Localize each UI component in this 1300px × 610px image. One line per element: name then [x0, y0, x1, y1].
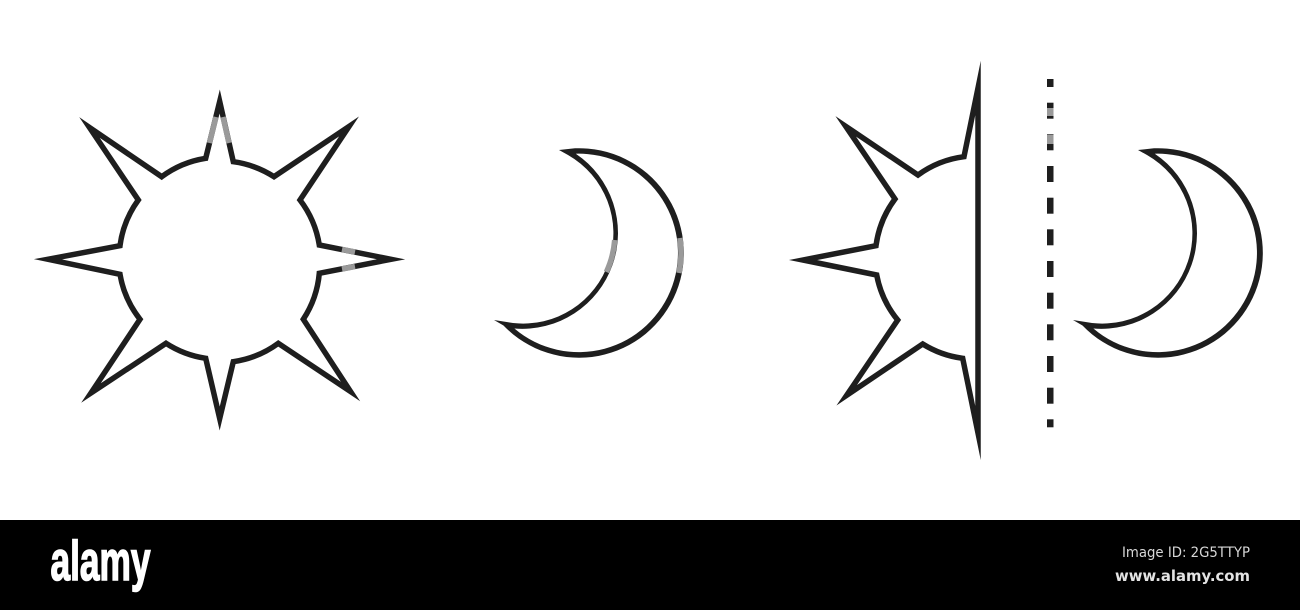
icon: crescent moon	[494, 148, 684, 358]
dashed divider line	[1047, 79, 1054, 427]
icon: second crescent moon	[1073, 148, 1263, 358]
logo wordmark: alamy	[50, 529, 150, 592]
image id: Image ID: 2G5TTYP	[1122, 545, 1250, 561]
footer bar	[0, 520, 1300, 610]
site url: www.alamy.com	[1115, 567, 1250, 585]
icon: full sun	[48, 102, 391, 418]
icon: half sun with solid edge	[803, 88, 978, 433]
